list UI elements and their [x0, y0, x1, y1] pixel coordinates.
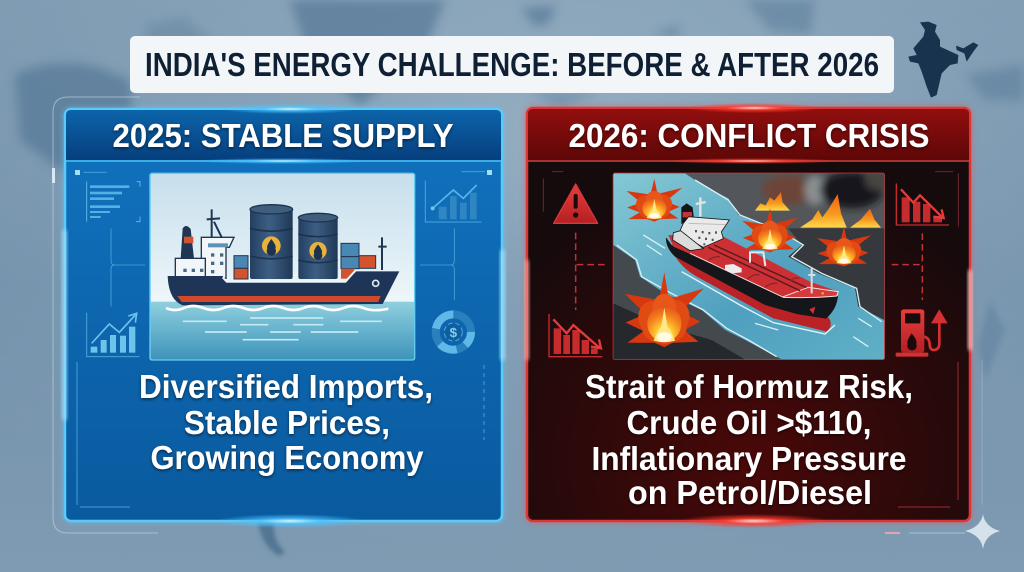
panel: 2026 conflict crisis	[527, 103, 970, 528]
black hull	[666, 237, 838, 319]
deck edge line	[690, 253, 783, 297]
red deck	[668, 235, 838, 297]
icon: dollar ring	[436, 314, 471, 350]
header: 2025: 2025: STABLE SUPPLY	[112, 117, 454, 154]
text: 2025 summary: Diversified Imports,	[139, 368, 433, 405]
hull	[168, 271, 399, 305]
header: 2025	[66, 110, 501, 161]
title banner	[130, 36, 894, 93]
barrel right	[298, 213, 338, 279]
frame accents	[52, 168, 900, 534]
superstructure	[175, 209, 234, 278]
land and smoke	[613, 170, 892, 359]
tanker	[666, 197, 838, 334]
header: 2026	[528, 109, 969, 161]
pipes	[708, 245, 806, 291]
waves and water lines	[166, 306, 388, 340]
lower red hull	[675, 256, 831, 332]
text: 2026 summary: on Petrol/Diesel	[628, 474, 872, 511]
icon: sparkle	[965, 514, 1000, 549]
icon: dollar ring: $	[450, 325, 458, 340]
text: 2025 summary	[139, 368, 433, 476]
connector lines	[83, 172, 485, 307]
barrel left	[250, 205, 293, 279]
icon: text list	[87, 182, 140, 222]
glow behind panels	[65, 108, 970, 521]
funnel and mast	[681, 203, 694, 224]
icons and tech lines: left panel	[75, 170, 492, 357]
superstructure block	[680, 217, 729, 247]
flames	[755, 192, 881, 228]
panel: 2025 stable supply	[65, 104, 502, 528]
icon: rising bar chart top right	[425, 181, 482, 222]
text: 2026 summary	[585, 368, 913, 511]
header: 2026: 2026: CONFLICT CRISIS	[568, 117, 930, 154]
illustration: cargo ship with oil barrels	[149, 173, 415, 361]
dashed connectors	[576, 233, 922, 310]
icon: fuel pump with up arrow	[896, 309, 948, 357]
panel edge glows	[62, 230, 972, 420]
text: 2026 summary: Crude Oil >$110,	[626, 404, 872, 441]
wake line	[682, 272, 835, 334]
outer frame lines	[53, 97, 982, 533]
icon: India map	[908, 22, 978, 98]
illustration: tanker under attack	[613, 170, 892, 360]
text: 2026 summary: Inflationary Pressure	[592, 440, 906, 477]
forecastle	[783, 287, 838, 298]
text: 2025 summary: Stable Prices,	[184, 404, 390, 441]
icons and tech lines: right panel	[543, 172, 958, 357]
corner ticks: left panel	[77, 362, 484, 507]
text: 2026 summary: Strait of Hormuz Risk,	[585, 368, 913, 405]
icon: falling chart top right	[896, 183, 949, 225]
corner ticks: right panel	[898, 362, 958, 507]
text: 2025 summary: Growing Economy	[150, 439, 424, 476]
title banner: INDIA'S ENERGY CHALLENGE: BEFORE & AFTER 2026	[145, 46, 879, 83]
water wakes	[617, 180, 882, 357]
icon: warning triangle	[554, 184, 598, 223]
icon: falling chart bottom left	[549, 314, 602, 357]
explosions	[625, 179, 871, 347]
icon: rising bar chart bottom left	[87, 313, 139, 357]
containers	[234, 243, 376, 279]
